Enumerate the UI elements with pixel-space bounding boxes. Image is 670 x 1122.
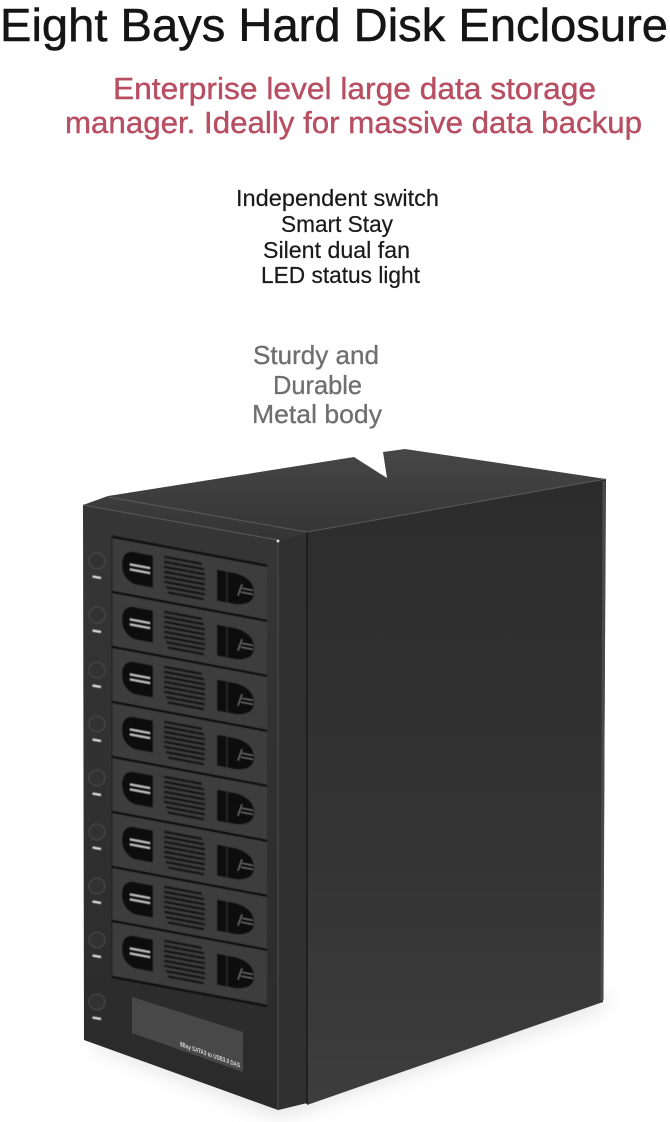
front label plate: 8Bay SATA3 to USB3.0 DAS [180, 1041, 240, 1070]
front label plate [132, 997, 243, 1072]
feature list: Independent switch [236, 185, 439, 211]
right side panel [307, 479, 606, 1105]
feature list: Smart Stay [281, 211, 393, 237]
metal body callout: Metal body [252, 399, 382, 429]
subtitle [65, 71, 642, 140]
top panel [83, 449, 606, 540]
metal body callout [252, 340, 382, 429]
power buttons and LEDs [89, 553, 105, 1019]
front panel [83, 505, 307, 1110]
product: eight bay enclosure [83, 449, 606, 1116]
subtitle: manager. Ideally for massive data backup [65, 105, 642, 140]
drive bays [112, 537, 267, 1006]
title: Eight Bays Hard Disk Enclosure [0, 0, 668, 51]
subtitle: Enterprise level large data storage [113, 71, 596, 106]
metal body callout: Sturdy and [253, 340, 379, 370]
feature list [236, 185, 439, 288]
feature list: Silent dual fan [263, 237, 410, 263]
floor shadow [95, 990, 605, 1116]
feature list: LED status light [261, 262, 421, 288]
metal body callout: Durable [273, 370, 362, 400]
